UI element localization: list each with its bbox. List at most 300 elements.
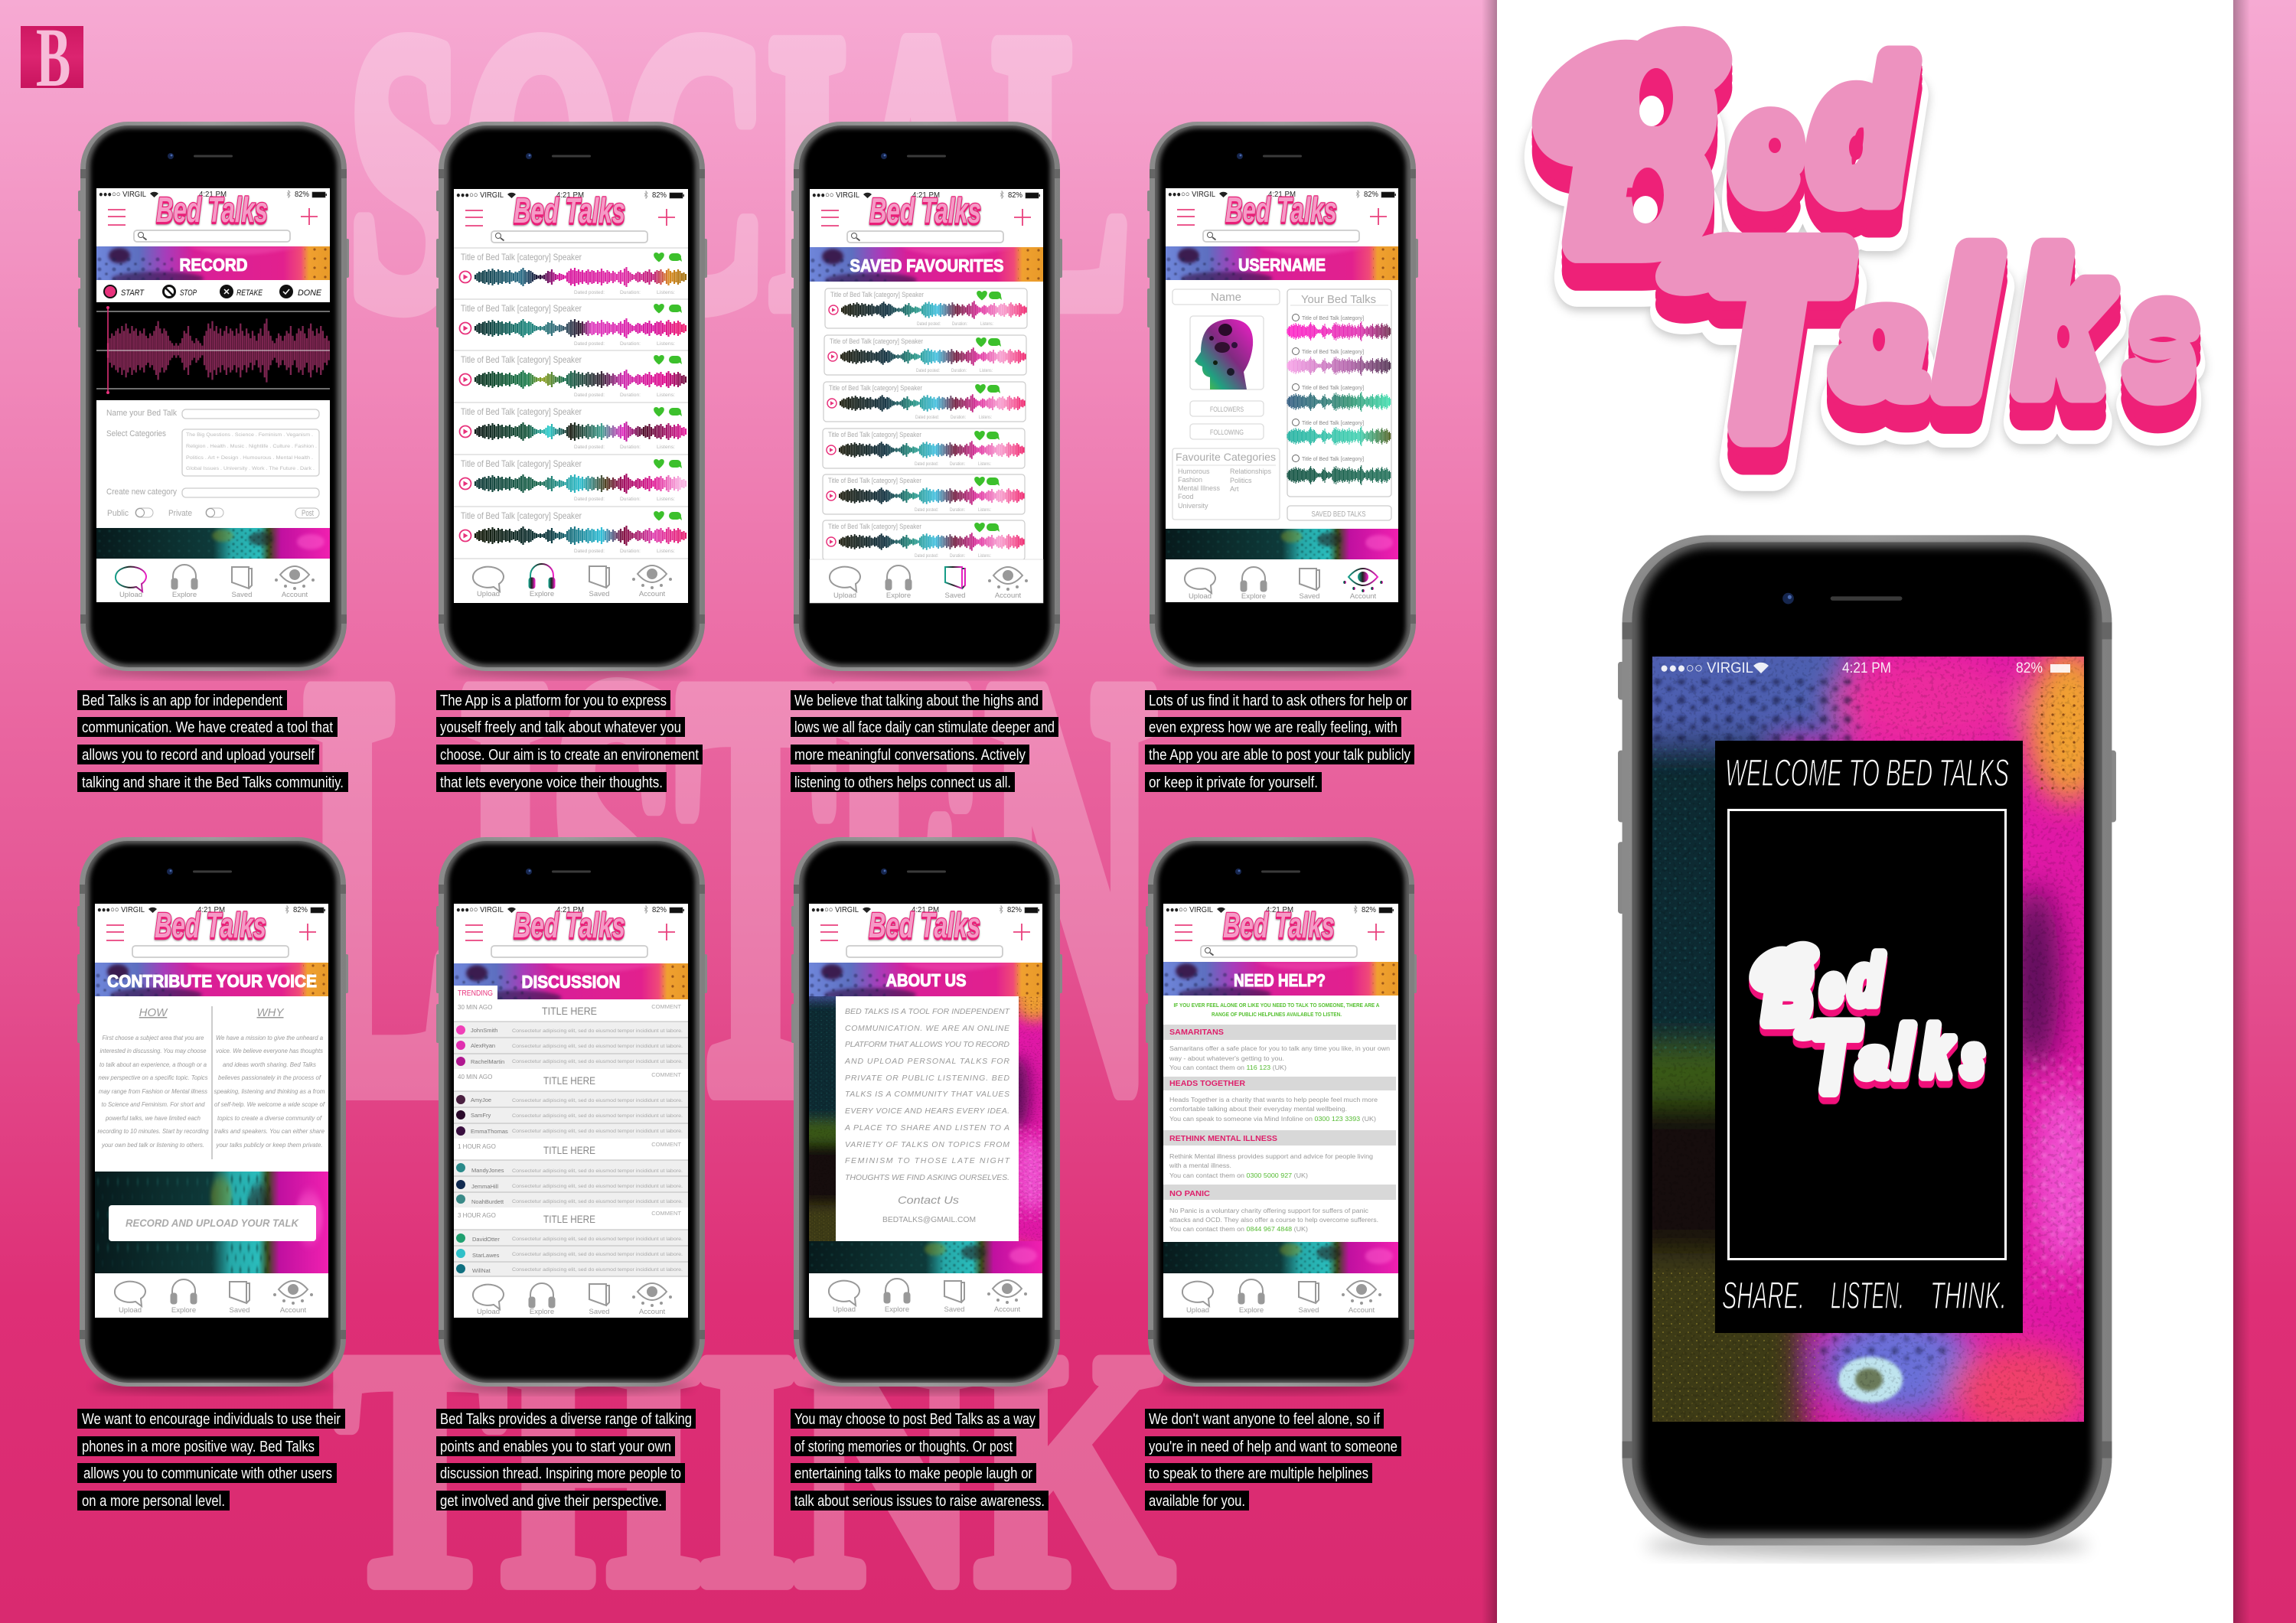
image background: [792, 950, 1057, 1286]
talk row 4: Dated posted:: [574, 445, 605, 450]
your bed talks: Title of Bed Talk [category]: [1302, 421, 1364, 426]
phone frame: [78, 122, 349, 677]
helpline: heads together: You can speak to someone via Mind Infoline on 0300 123 3393 (UK): [1169, 1116, 1376, 1123]
about card: [836, 996, 1019, 1241]
big logo: Bed Talks: [1510, 19, 2195, 515]
discussion thread 1: [454, 1003, 688, 1069]
discussion thread 1: JohnSmith: [471, 1027, 497, 1034]
about card: PRIVATE OR PUBLIC LISTENING. BED: [845, 1074, 1009, 1083]
saved card 6: Dated posted:: [915, 553, 938, 559]
discussion thread 1: TITLE HERE: [542, 1005, 597, 1017]
logo pink lettering with extrusion: e: [1733, 64, 1799, 230]
saved card 5: Duration:: [950, 507, 965, 513]
status bar: 82%: [1008, 191, 1022, 200]
helpline: no panic: [1163, 1185, 1396, 1233]
status bar: [812, 191, 1040, 200]
record controls: RETAKE: [236, 288, 263, 298]
how column: [98, 1006, 209, 1149]
navigation bar: [473, 564, 672, 598]
discussion thread 1: COMMENT: [651, 1003, 681, 1010]
logo white outline: [1510, 49, 2195, 515]
logo pink lettering with extrusion: [1516, 19, 2195, 481]
status bar: 4:21 PM: [199, 190, 227, 199]
helpline: heads together: [1163, 1077, 1396, 1123]
discussion thread 1: Consectetur adipiscing elit, sed do eiusmod tempor incididunt ut labore.: [512, 1059, 683, 1064]
icon: explore: [171, 565, 197, 589]
contribute screen: [95, 904, 328, 1318]
saved card 6: Title of Bed Talk [category] Speaker: [828, 523, 921, 531]
icon: explore: [884, 1279, 910, 1303]
navigation labels: Upload: [1189, 592, 1212, 601]
logo: Bed Talks: [869, 905, 980, 945]
saved favourites screen: [810, 189, 1043, 603]
header controls: menu, add, search: [1175, 924, 1384, 957]
talk row 4: [459, 406, 686, 450]
logo: Bed Talks: [156, 190, 268, 230]
status bar: 82%: [1362, 905, 1376, 914]
navigation labels: Saved: [945, 592, 965, 600]
why column: your talks publicly or keep them private.: [216, 1141, 323, 1149]
text block: conversations: [791, 690, 1058, 792]
status bar: 4:21 PM: [1842, 660, 1891, 676]
followers button: [1190, 401, 1264, 416]
logo white outline: e: [1733, 98, 1799, 264]
helpline: samaritans: Samaritans offer a safe place for you to talk any time you like, in your own: [1169, 1045, 1390, 1052]
banner: username: [1166, 246, 1398, 285]
text block: encourage: on a more personal level.: [82, 1493, 225, 1510]
talk row 5: Title of Bed Talk [category] Speaker: [461, 458, 582, 469]
splash logo: k: [1922, 1014, 1954, 1091]
status bar: 4:21 PM: [556, 905, 584, 914]
about card: Contact Us: [898, 1194, 959, 1206]
status bar: 4:21 PM: [912, 191, 940, 200]
your bed talks: Title of Bed Talk [category]: [1302, 386, 1364, 391]
text block: expressing feelings: the App you are able to post your talk publicly: [1149, 747, 1411, 764]
splash tagline: THINK.: [1930, 1274, 2007, 1317]
talk row 4: Listens:: [657, 445, 675, 450]
helpline: heads together: HEADS TOGETHER: [1169, 1079, 1245, 1088]
splash logo: e: [1820, 956, 1844, 1017]
navigation labels: Upload: [477, 590, 500, 598]
talk row 6: Listens:: [657, 549, 675, 554]
status bar: 82%: [652, 191, 667, 200]
saved card 2: Listens:: [980, 368, 993, 373]
talk row 6: Duration:: [620, 549, 641, 554]
navigation bar: [473, 1283, 672, 1316]
recording form: Create new category: [106, 487, 177, 497]
discussion thread 2: 40 MIN AGO: [458, 1074, 492, 1080]
navigation labels: Account: [280, 1306, 307, 1315]
status bar: ●●●○○ VIRGIL: [811, 905, 859, 914]
banner: saved favourites: SAVED FAVOURITES: [850, 256, 1004, 275]
navigation labels: Saved: [230, 1306, 249, 1315]
navigation bar: [810, 559, 1043, 603]
navigation labels: Explore: [885, 1305, 909, 1314]
logo white outline: k: [2019, 253, 2109, 461]
text block: diverse range: [436, 1409, 696, 1511]
bottom image strip: [96, 528, 330, 559]
banner: record: [96, 246, 330, 285]
helpline: rethink mental illness: with a mental illness.: [1169, 1162, 1231, 1169]
saved card 1: Title of Bed Talk [category] Speaker: [830, 291, 924, 299]
discussion thread 4: TITLE HERE: [543, 1213, 595, 1225]
icon: explore: [171, 1279, 197, 1304]
navigation labels: Explore: [886, 592, 911, 600]
navigation labels: [119, 591, 308, 599]
navigation labels: Explore: [172, 591, 197, 599]
talk row 1: Listens:: [657, 290, 675, 295]
avatar: [1190, 316, 1264, 389]
discussion thread 4: Consectetur adipiscing elit, sed do eiusmod tempor incididunt ut labore.: [512, 1267, 683, 1273]
saved card 6: [823, 520, 1025, 560]
navigation labels: Saved: [944, 1305, 964, 1314]
splash logo: T: [1812, 1005, 1860, 1111]
explore screen: [454, 189, 688, 603]
about card: VARIETY OF TALKS ON TOPICS FROM: [845, 1140, 1009, 1149]
status bar: ●●●○○ VIRGIL: [812, 191, 859, 200]
phone 3: saved favourites: [791, 122, 1062, 677]
status bar: 82%: [652, 905, 667, 914]
text block: platform: choose. Our aim is to create an environement: [440, 747, 699, 764]
favourite categories: Mental Illness: [1178, 484, 1221, 492]
text block: encourage: [77, 1409, 345, 1511]
about card: FEMINISM TO THOSE LATE NIGHT: [845, 1156, 1011, 1165]
icon: saved: [230, 1282, 249, 1303]
why column: WHY: [257, 1006, 284, 1019]
logo pink lettering with extrusion: l: [1941, 218, 1993, 432]
status bar: 82%: [293, 905, 308, 914]
discussion thread 3: JemmaHill: [471, 1183, 498, 1190]
saved card 5: Title of Bed Talk [category] Speaker: [828, 477, 921, 485]
phone frame: [1618, 535, 2116, 1556]
name field: Name: [1211, 291, 1241, 304]
header controls: menu, add, search: [820, 924, 1030, 957]
logo white outline: s: [2129, 283, 2195, 459]
text block: storing memories: talk about serious issues to raise awareness.: [794, 1493, 1045, 1510]
discussion thread 4: Consectetur adipiscing elit, sed do eiusmod tempor incididunt ut labore.: [512, 1252, 683, 1257]
discussion thread 3: [454, 1141, 688, 1207]
bottom image strip: [1166, 529, 1398, 559]
phone frame: [436, 122, 707, 677]
status bar: [1660, 660, 2070, 676]
discussion thread 4: [454, 1210, 688, 1276]
icon: account: [632, 565, 672, 589]
discussion thread 2: SamFry: [471, 1112, 491, 1119]
status bar: [811, 905, 1039, 914]
icon: explore: [529, 1283, 555, 1308]
helpline: heads together: comfortable talking about their everyday mental wellbeing.: [1169, 1106, 1347, 1113]
white right panel: [1482, 0, 2250, 1623]
recording form: [106, 409, 319, 518]
navigation labels: Upload: [833, 1305, 856, 1314]
talk row 1: Duration:: [620, 290, 641, 295]
text block: helplines: you're in need of help and want to someone: [1149, 1439, 1397, 1455]
banner: saved favourites: [810, 247, 1043, 287]
saved card 5: [823, 474, 1025, 514]
talk row 3: [459, 354, 686, 398]
banner: username: USERNAME: [1238, 255, 1326, 275]
how column: may range from Fashion or Mental illness: [99, 1087, 208, 1095]
talk row 5: Duration:: [620, 497, 641, 502]
text block: helplines: We don't want anyone to feel alone, so if: [1149, 1411, 1380, 1428]
waveform recorder: [96, 302, 330, 400]
how column: your own bed talk or listening to others.: [101, 1141, 204, 1149]
phone 7: about us: [791, 837, 1062, 1393]
discussion thread 1: Consectetur adipiscing elit, sed do eiusmod tempor incididunt ut labore.: [512, 1044, 683, 1049]
logo: Bed Talks: [514, 905, 625, 945]
saved card 2: Dated posted:: [916, 368, 940, 373]
your bed talks: [1287, 289, 1391, 497]
banner: discussion: [454, 963, 688, 1005]
saved card 3: Listens:: [979, 415, 992, 420]
helpline intro: [1174, 1003, 1379, 1018]
status bar: ●●●○○ VIRGIL: [456, 905, 504, 914]
about card: COMMUNICATION. WE ARE AN ONLINE: [845, 1024, 1010, 1033]
help screen: [1163, 904, 1398, 1318]
about card: BED TALKS IS A TOOL FOR INDEPENDENT: [845, 1007, 1011, 1016]
phone frame: [791, 122, 1062, 677]
following button: [1190, 424, 1264, 439]
why column: topics to create a diverse community of: [217, 1114, 323, 1122]
status bar: [1168, 190, 1396, 199]
discussion thread 4: DavidOtter: [472, 1236, 500, 1243]
helpline: samaritans: You can contact them on 116 123 (UK): [1169, 1064, 1287, 1071]
why column: [214, 1006, 326, 1149]
text block: encourage: allows you to communicate with other users: [83, 1465, 332, 1482]
status bar: 82%: [1007, 905, 1022, 914]
navigation labels: [119, 1306, 307, 1315]
record controls: STOP: [180, 288, 197, 298]
talk row 1: Dated posted:: [574, 290, 605, 295]
icon: upload: [115, 1282, 145, 1306]
text block: helplines: to speak to there are multiple helplines: [1149, 1465, 1368, 1482]
icon: account: [989, 567, 1027, 591]
discussion thread 2: TITLE HERE: [543, 1074, 595, 1087]
navigation labels: Saved: [1300, 592, 1319, 601]
splash logo: B: [1764, 940, 1812, 1042]
icon: upload: [473, 1285, 504, 1309]
icon: upload: [1182, 1282, 1213, 1306]
text block: intro: communication. We have created a tool that: [82, 719, 333, 736]
talk row 2: Listens:: [657, 341, 675, 347]
icon: saved: [589, 1284, 609, 1305]
status bar: [99, 190, 327, 199]
helpline: samaritans: SAMARITANS: [1169, 1028, 1224, 1037]
favourite categories: [1172, 448, 1280, 520]
discussion thread 2: [454, 1071, 688, 1139]
splash logo: l: [1894, 1013, 1913, 1092]
banner: discussion: DISCUSSION: [522, 972, 620, 992]
splash logo: [1743, 940, 1985, 1111]
helpline: rethink mental illness: You can contact them on 0300 5000 927 (UK): [1169, 1172, 1308, 1179]
icon: account active: [1344, 569, 1382, 592]
how column: to talk about an experience, a though or a: [99, 1061, 207, 1068]
text block: conversations: We believe that talking about the highs and: [794, 693, 1039, 709]
text block: expressing feelings: Lots of us find it hard to ask others for help or: [1149, 693, 1407, 709]
saved card 1: [825, 288, 1027, 328]
favourite categories: University: [1178, 502, 1208, 510]
recording form: Religion . Health . Music . Nightlife . Culture . Fashion .: [186, 444, 317, 449]
talk row 2: Dated posted:: [574, 341, 605, 347]
talk row 6: [459, 510, 686, 554]
status bar: ●●●○○ VIRGIL: [456, 191, 504, 200]
how column: First choose a subject area that you are: [103, 1034, 204, 1041]
navigation labels: [1189, 592, 1377, 601]
saved card 3: [823, 382, 1026, 422]
discussion thread 1: AlexRyan: [471, 1042, 495, 1049]
favourite categories: Art: [1230, 485, 1239, 493]
logo: Bed Talks: [155, 905, 266, 945]
splash screen: [1622, 626, 2112, 1452]
discussion thread 2: COMMENT: [651, 1071, 681, 1078]
icon: upload: [473, 567, 504, 592]
recording form: The Big Questions . Science . Feminism . Veganism .: [186, 432, 313, 438]
discussion thread 3: Consectetur adipiscing elit, sed do eiusmod tempor incididunt ut labore.: [512, 1199, 683, 1204]
discussion thread 1: RachelMartin: [471, 1058, 504, 1065]
saved card 4: Title of Bed Talk [category] Speaker: [828, 431, 921, 439]
saved bed talks button: SAVED BED TALKS: [1312, 510, 1366, 519]
navigation labels: [833, 592, 1022, 600]
navigation labels: Saved: [232, 591, 252, 599]
logo pink lettering with extrusion: d: [1812, 28, 1910, 235]
navigation labels: [477, 1308, 666, 1316]
bottom image strip: [1163, 1242, 1398, 1273]
navigation labels: Account: [639, 1308, 666, 1316]
icon: upload: [830, 567, 860, 592]
icon: explore: [1241, 567, 1267, 592]
navigation labels: Saved: [1299, 1306, 1319, 1315]
discussion thread 1: 30 MIN AGO: [458, 1004, 492, 1011]
talk list: [454, 248, 688, 559]
text block: storing memories: You may choose to post Bed Talks as a way: [794, 1411, 1035, 1428]
icon: upload active: [116, 567, 146, 592]
text block: encourage: phones in a more positive way. Bed Talks: [82, 1439, 315, 1455]
saved card 3: Title of Bed Talk [category] Speaker: [829, 384, 922, 393]
discussion thread 4: WillNat: [472, 1267, 491, 1274]
talk row 5: Listens:: [657, 497, 675, 502]
about card: TALKS IS A COMMUNITY THAT VALUES: [845, 1090, 1009, 1099]
recording form: Name your Bed Talk: [106, 409, 177, 418]
discussion thread 3: COMMENT: [651, 1141, 681, 1148]
icon: upload: [829, 1281, 859, 1305]
text block: storing memories: [791, 1409, 1049, 1511]
navigation labels: Upload: [119, 591, 142, 599]
record controls: [104, 285, 322, 298]
icon: saved: [232, 567, 252, 588]
your bed talks: Your Bed Talks: [1301, 293, 1376, 306]
about card: EVERY VOICE AND HEARS EVERY IDEA.: [845, 1106, 1009, 1116]
logo white outline: B: [1574, 53, 1710, 330]
record controls: START: [121, 288, 145, 298]
how column: recording to 10 minutes. Start by recording: [98, 1127, 209, 1135]
welcome card: [1715, 741, 2023, 1333]
record screen: [96, 188, 330, 602]
status bar: 4:21 PM: [556, 191, 584, 200]
helpline: no panic: No Panic is a voluntary charity offering support for suffers of panic: [1169, 1207, 1368, 1214]
text block: expressing feelings: even express how we are really feeling, with: [1149, 719, 1397, 736]
status bar: [1166, 905, 1394, 914]
navigation labels: Saved: [589, 590, 609, 598]
logo pink lettering with extrusion: a: [1838, 260, 1923, 424]
navigation labels: [477, 590, 666, 598]
status bar: ●●●○○ VIRGIL: [99, 190, 146, 199]
how column: powerful talks, we have limited each: [105, 1114, 201, 1122]
phone 5: contribute your voice: [77, 837, 348, 1393]
logo white outline: a: [1838, 294, 1923, 458]
status bar: [456, 191, 684, 200]
status bar: 4:21 PM: [912, 905, 939, 914]
navigation labels: Upload: [119, 1306, 142, 1315]
discussion thread 2: AmyJoe: [471, 1097, 491, 1103]
navigation labels: [1186, 1306, 1375, 1315]
recording form: Private: [168, 509, 192, 518]
your bed talks: Title of Bed Talk [category]: [1302, 350, 1364, 355]
white frame: [1728, 810, 2005, 1260]
text block: storing memories: of storing memories or thoughts. Or post: [794, 1439, 1013, 1455]
username screen: [1166, 188, 1398, 602]
talk row 5: [459, 458, 686, 502]
logo letter counters: [1632, 68, 2177, 363]
text block: diverse range: points and enables you to start your own: [440, 1439, 671, 1455]
navigation labels: Upload: [1186, 1306, 1209, 1315]
logo pink lettering with extrusion: T: [1707, 199, 1844, 481]
navigation labels: Account: [1350, 592, 1377, 601]
how column: HOW: [139, 1006, 168, 1019]
icon: explore: [885, 565, 912, 590]
navigation bar: [115, 1279, 312, 1315]
navigation labels: Account: [1349, 1306, 1375, 1315]
banner: need help: [1163, 962, 1398, 1001]
column divider: [211, 1006, 213, 1159]
saved card 3: Dated posted:: [915, 415, 939, 420]
status bar: [456, 905, 684, 914]
talk row 1: Title of Bed Talk [category] Speaker: [461, 252, 582, 262]
text block: platform: that lets everyone voice their thoughts.: [440, 774, 663, 791]
discussion thread 3: Consectetur adipiscing elit, sed do eiusmod tempor incididunt ut labore.: [512, 1168, 683, 1174]
saved card 4: Listens:: [978, 461, 991, 467]
icon: saved: [589, 566, 609, 588]
helpline: no panic: attacks and OCD. They also offer a course to help overcome sufferers.: [1169, 1217, 1378, 1224]
discussion thread 2: Consectetur adipiscing elit, sed do eiusmod tempor incididunt ut labore.: [512, 1113, 683, 1119]
phone 2: explore list: [436, 122, 707, 677]
why column: tralks and speakers. You can either share: [214, 1127, 325, 1135]
hero phone: welcome splash: [1618, 535, 2116, 1556]
status bar: 4:21 PM: [1268, 190, 1296, 199]
recording form: Politics . Art + Design . Humourous . Mental Health .: [186, 455, 313, 461]
text block: conversations: lows we all face daily can stimulate deeper and: [794, 719, 1055, 736]
icon: account: [987, 1280, 1027, 1304]
text block: diverse range: get involved and give their perspective.: [440, 1493, 662, 1510]
logo: Bed Talks: [514, 191, 625, 230]
icon: blackletter B badge: [21, 11, 83, 104]
splash tagline: SHARE.: [1722, 1274, 1805, 1317]
status bar: ●●●○○ VIRGIL: [1168, 190, 1215, 199]
text block: platform: youself freely and talk about whatever you: [440, 719, 681, 736]
status bar: 4:21 PM: [197, 905, 225, 914]
recording form: Public: [107, 509, 129, 518]
navigation labels: Account: [282, 591, 308, 599]
logo pink lettering with extrusion: s: [2129, 249, 2195, 425]
icon: blackletter B badge: B: [36, 11, 70, 104]
helpline: rethink mental illness: RETHINK MENTAL ILLNESS: [1169, 1134, 1277, 1143]
splash logo: d: [1848, 942, 1883, 1019]
saved card 6: Listens:: [978, 553, 991, 559]
saved bed talks button: [1287, 506, 1391, 520]
phone 4: user profile: [1147, 122, 1418, 677]
banner: contribute your voice: CONTRIBUTE YOUR VOICE: [107, 971, 317, 991]
splash logo: s: [1961, 1025, 1985, 1090]
text block: intro: talking and share it the Bed Talks communitiy.: [82, 774, 344, 791]
